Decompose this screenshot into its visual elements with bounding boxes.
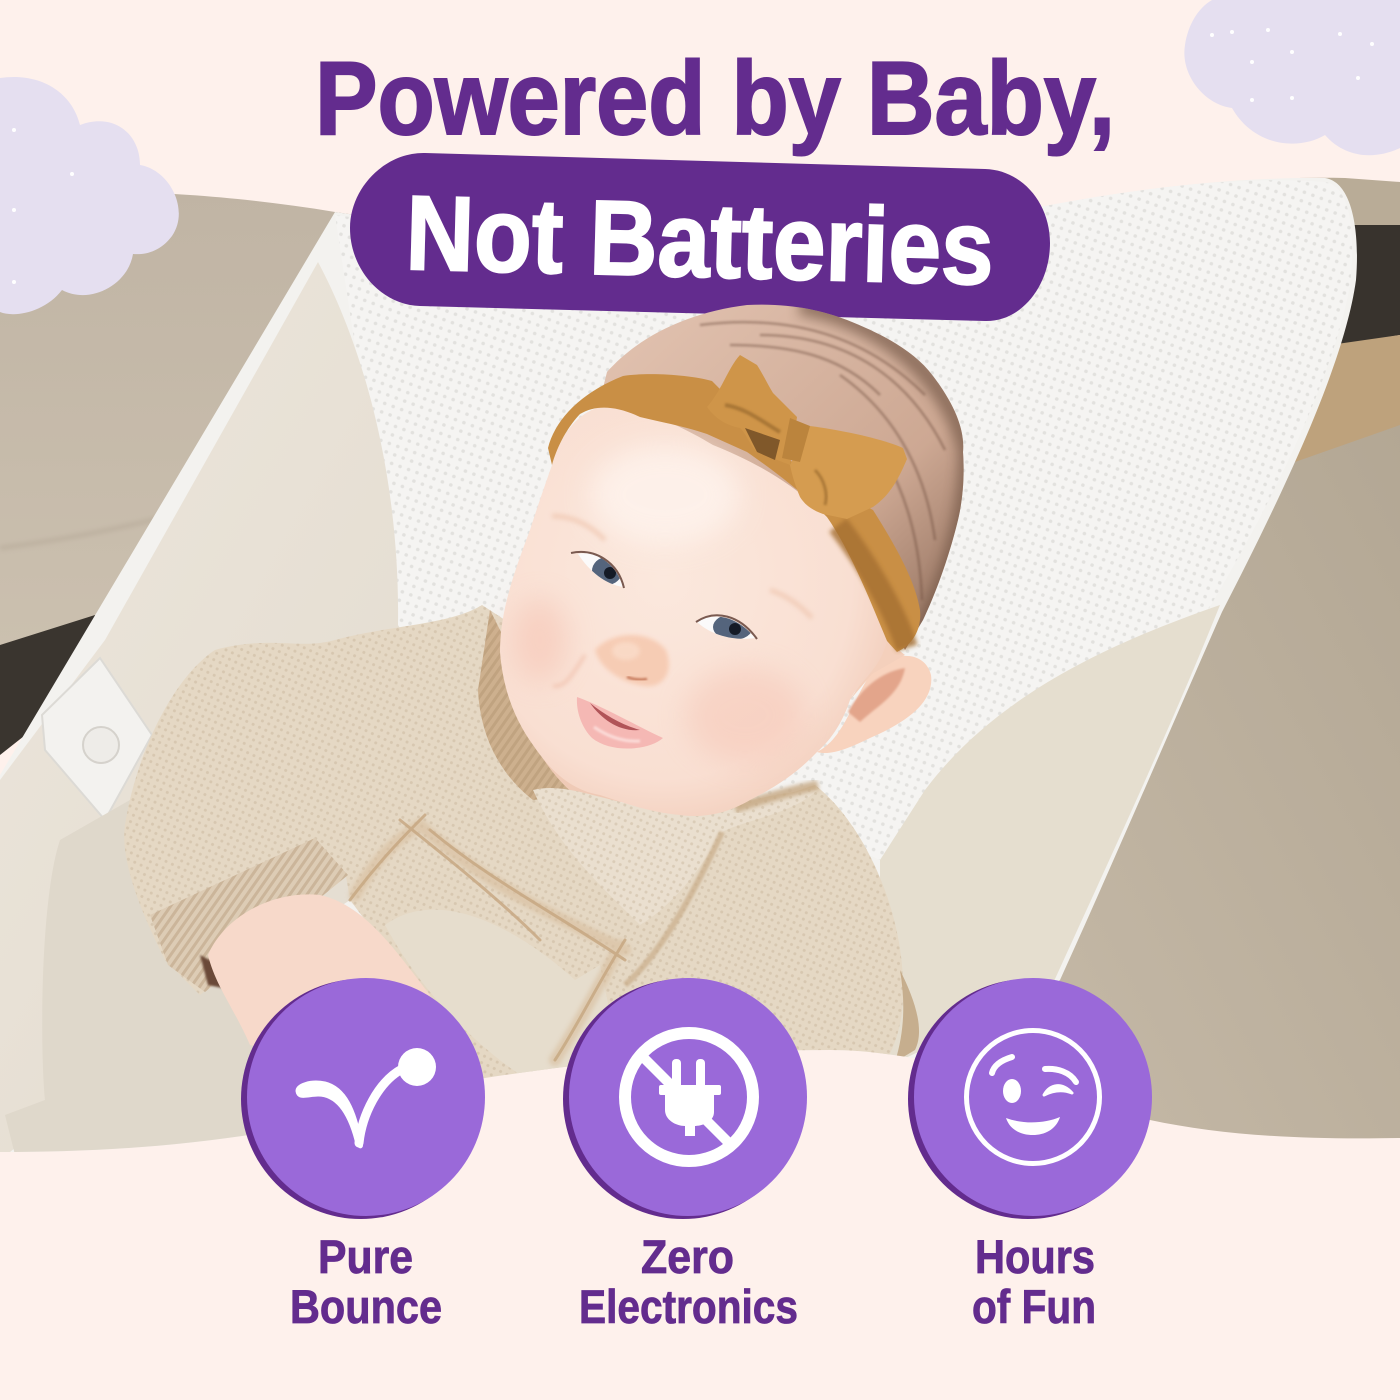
temple skin joining ear	[850, 641, 905, 700]
sweater chest panel	[385, 910, 620, 1075]
baby	[124, 305, 968, 1100]
icon: winking face	[966, 1030, 1100, 1164]
seat outer frame	[0, 178, 1357, 1160]
sweater body	[124, 605, 903, 1100]
left strap buckle	[42, 658, 152, 820]
label: pure bounce	[290, 1230, 442, 1333]
sweater side shadow	[897, 970, 919, 1056]
room: carpet on the right	[1059, 425, 1400, 1138]
eyebrows	[552, 516, 812, 618]
title pill	[350, 153, 1050, 321]
hand	[208, 894, 430, 1046]
hair	[600, 305, 968, 650]
label: zero electronics	[579, 1230, 798, 1333]
ear	[817, 656, 931, 753]
smile crease	[553, 655, 585, 686]
under-cuff shadow	[198, 954, 222, 990]
sweater collar	[478, 610, 575, 800]
label: pure bounce: Pure	[318, 1230, 413, 1283]
forehead highlight	[590, 445, 740, 545]
label: hours of fun	[972, 1230, 1096, 1333]
label: zero electronics: Zero	[641, 1230, 734, 1283]
badge: pure bounce	[241, 978, 485, 1219]
tassels	[350, 815, 625, 1060]
label: hours of fun: Hours	[975, 1230, 1095, 1283]
room: sofa on the left	[0, 194, 352, 645]
sweater cuff	[150, 838, 348, 992]
icon: crossed plug	[625, 1033, 753, 1161]
sweater neck roll	[533, 785, 818, 985]
headband shadow	[838, 525, 907, 648]
left eye	[571, 552, 624, 588]
label: pure bounce: Bounce	[290, 1280, 442, 1333]
label: zero electronics: Electronics	[579, 1280, 798, 1333]
blanket lower left	[6, 800, 254, 1152]
face	[500, 405, 887, 816]
top right dark band	[1341, 225, 1400, 344]
seat beige panel right	[880, 605, 1220, 1070]
icon: bouncing ball	[297, 1048, 436, 1147]
neck	[542, 758, 621, 802]
right eye	[696, 614, 757, 640]
bow	[707, 355, 907, 519]
label: hours of fun: of Fun	[972, 1280, 1096, 1333]
headband	[548, 374, 920, 652]
badge: hours of fun	[908, 978, 1152, 1219]
wood skirting	[1295, 335, 1400, 462]
top right wall	[1300, 178, 1400, 225]
cloud: top left	[0, 77, 179, 314]
photo backdrop: room and bouncer seat	[0, 175, 1400, 1160]
cheek blush left	[512, 598, 568, 682]
seat beige panel left	[0, 262, 399, 1152]
cheek blush right	[685, 667, 805, 763]
badge: zero electronics	[563, 978, 807, 1219]
nose	[595, 635, 669, 686]
pill text: Not Batteries	[404, 174, 995, 307]
dark floor gap	[0, 615, 95, 755]
seat mesh panel	[335, 180, 1352, 860]
mouth	[577, 697, 663, 749]
title line 1: Powered by Baby,	[315, 41, 1115, 157]
cloud: top right	[1184, 0, 1400, 155]
